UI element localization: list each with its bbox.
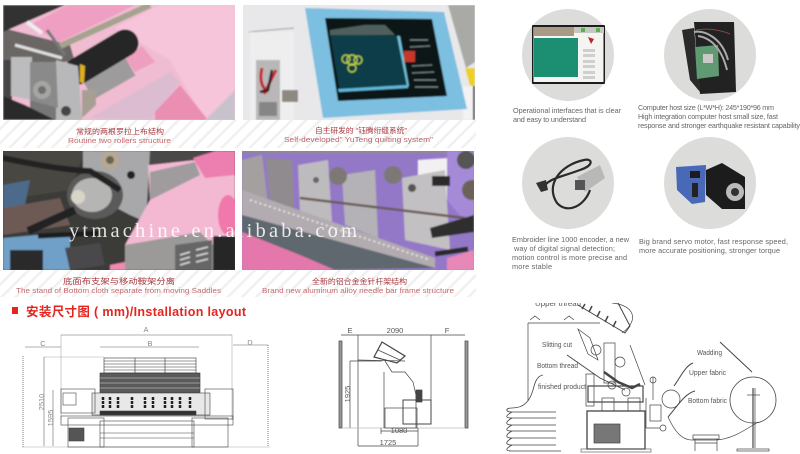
- schematic: fabric rolls: [662, 342, 776, 451]
- schematic labels: Bottom thread: [537, 363, 578, 370]
- text: computer host description: High integration computer host small size, fast: [638, 112, 778, 121]
- panel: quilting system: [238, 0, 480, 148]
- heading: installation layout: [12, 304, 247, 319]
- dimension labels: side elevation: F: [445, 326, 450, 335]
- text: encoder description: way of digital signal detection;: [513, 244, 615, 253]
- feature: computer host: [638, 9, 800, 130]
- dimension labels: front elevation: C: [40, 339, 46, 348]
- text: interface description: and easy to understand: [513, 115, 586, 124]
- dimension labels: front elevation: 1595: [46, 410, 55, 426]
- dimension labels: front elevation: [37, 325, 253, 426]
- schematic: frame and top carriage: [528, 303, 645, 406]
- dimension labels: front elevation: 2510: [37, 394, 46, 410]
- icon: red square bullet: [12, 307, 18, 314]
- dimension labels: side elevation: 1925: [343, 386, 352, 402]
- caption: Chinese: 常规的两根罗拉上布结构: [76, 126, 165, 136]
- dimension labels: side elevation: [343, 326, 450, 447]
- caption: English: Self-developed" YuTeng quilting system": [284, 135, 433, 144]
- schematic labels: Slitting cut: [542, 342, 572, 349]
- caption: English: Brand new aluminum alloy needle bar frame structure: [262, 286, 454, 295]
- caption: Chinese: 自主研发的 “钰腾绗缝系统”: [315, 125, 407, 135]
- panel: two rollers structure: [0, 0, 240, 148]
- watermark: ytmachine.en.alibaba.com: [69, 220, 357, 242]
- circle: encoder photo: [522, 137, 614, 229]
- feature: operational interface: [513, 9, 622, 124]
- chart: front elevation drawing: [22, 335, 270, 447]
- caption band: [0, 270, 238, 297]
- text: computer host description: Computer host size (L*W*H): 245*190*96 mm: [638, 103, 774, 112]
- schematic labels: Upper thread: [535, 301, 581, 308]
- caption: English: Routine two rollers structure: [68, 136, 171, 145]
- dimension labels: front elevation: B: [147, 339, 153, 348]
- caption band: [238, 270, 476, 297]
- circle: computer host photo: [664, 9, 756, 101]
- feature: encoder: [512, 137, 630, 271]
- chart: side elevation drawing: [339, 335, 468, 446]
- schematic labels: [535, 301, 727, 405]
- schematic labels: Wadding: [697, 350, 722, 357]
- machine: side profile: [358, 342, 431, 428]
- text: computer host description: [638, 103, 800, 130]
- caption: Chinese: 底面布支架与移动鞍架分离: [63, 276, 175, 286]
- photo: touch screen panel: [243, 5, 475, 120]
- panel: needle bar frame: [238, 148, 482, 297]
- chart: fabric path schematic: [507, 303, 776, 452]
- dimension labels: front elevation: D: [247, 338, 253, 347]
- text: encoder description: motion control is more precise and: [512, 253, 627, 262]
- dimension labels: side elevation: 2090: [387, 326, 403, 335]
- schematic: machine body: [581, 377, 666, 452]
- photo: stand and saddle: [0, 148, 240, 273]
- text: encoder description: [512, 235, 630, 271]
- text: encoder description: more stable: [512, 262, 552, 271]
- schematic: finished product stack: [507, 375, 561, 451]
- text: servo description: Big brand servo motor, fast response speed,: [639, 237, 788, 246]
- caption band: [238, 120, 476, 148]
- caption: English: The stand of Bottom cloth separate from moving Saddles: [16, 286, 221, 295]
- photo: needle bar frame: [240, 148, 482, 273]
- heading text: 安装尺寸图 ( mm)/Installation layout: [26, 304, 247, 319]
- dimension labels: side elevation: E: [347, 326, 353, 335]
- dimension labels: side elevation: 1725: [380, 438, 396, 447]
- circle: interface screenshot: [522, 9, 614, 101]
- schematic labels: Upper fabric: [689, 370, 726, 377]
- text: servo description: [639, 237, 788, 255]
- dimension labels: side elevation: 1080: [391, 426, 407, 435]
- photo: pink fabric on rollers: [3, 5, 235, 120]
- caption: Chinese: 全新的铝合金金针杆架结构: [312, 276, 408, 286]
- caption band: [0, 120, 238, 148]
- dimension labels: front elevation: A: [143, 325, 149, 334]
- text: interface description: Operational interfaces that is clear: [513, 106, 622, 115]
- text: interface description: [513, 106, 622, 124]
- schematic labels: Bottom fabric: [688, 398, 727, 405]
- machine: needle rows: [61, 373, 233, 425]
- feature: servo motor: [639, 137, 788, 255]
- machine: rack: [104, 358, 196, 386]
- machine: base: [68, 418, 228, 447]
- text: servo description: more accurate positioning, stronger torque: [639, 246, 780, 255]
- text: computer host description: response and stronger earthquake resistant capability: [638, 121, 800, 130]
- panel: bottom cloth stand: [0, 148, 240, 297]
- circle: servo motor photo: [664, 137, 756, 229]
- schematic labels: finished product: [538, 384, 586, 391]
- text: encoder description: Embroider line 1000 encoder, a new: [512, 235, 630, 244]
